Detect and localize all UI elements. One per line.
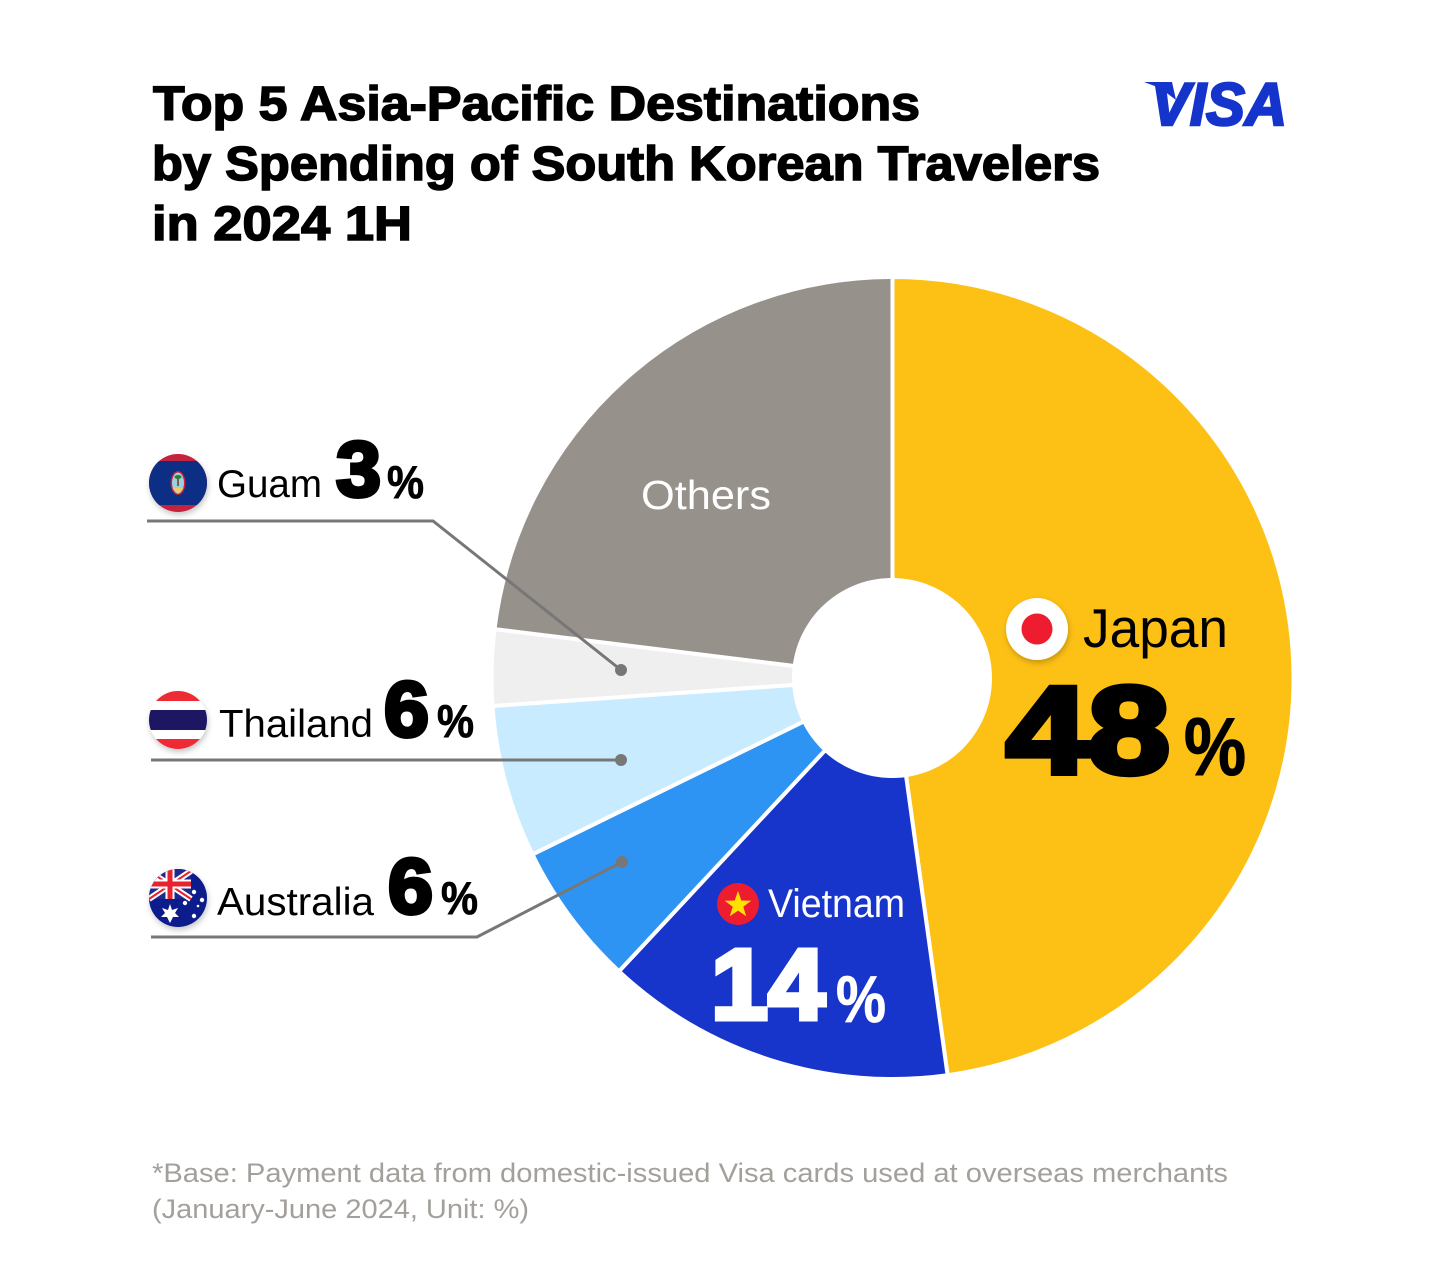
value: 6: 6 [388, 842, 433, 930]
country name: Guam: Guam [217, 463, 322, 506]
slice: Australia 6% [532, 678, 892, 971]
leader line [151, 758, 621, 762]
value: 3: 3 [336, 425, 381, 513]
label: Japan 48% [1006, 597, 1246, 800]
label: Vietnam 14% [711, 882, 905, 1041]
leader line [147, 521, 621, 670]
country name: Australia: Australia [217, 881, 374, 924]
donut hole [792, 578, 992, 778]
donut chart [492, 277, 1294, 1079]
footnote: (January-June 2024, Unit: %) [152, 1194, 529, 1224]
title: by Spending of South Korean Travelers [152, 138, 1100, 191]
value: 6: 6 [384, 665, 429, 753]
footnote: *Base: Payment data from domestic-issued Visa cards used at overseas merchants [152, 1158, 1228, 1188]
leader dot [615, 664, 627, 676]
percent sign: % [836, 962, 886, 1036]
title [152, 78, 1100, 251]
label: Others: Others [641, 472, 771, 518]
callout: Thailand 6% [147, 680, 627, 766]
leader line [151, 862, 622, 937]
icon: Japan flag [1006, 598, 1068, 660]
percent sign: % [441, 872, 478, 924]
slice: Guam 3% [492, 629, 892, 706]
value: 14: 14 [711, 929, 825, 1041]
icon: Vietnam flag [717, 883, 759, 925]
percent sign: % [437, 695, 474, 747]
callout: Australia 6% [147, 856, 628, 938]
slice: Thailand 6% [492, 678, 892, 854]
title: Top 5 Asia-Pacific Destinations [153, 78, 920, 131]
slice: Japan 48% [892, 277, 1294, 1075]
country name: Thailand: Thailand [219, 703, 373, 746]
leader dot [615, 754, 627, 766]
icon: Australia flag [149, 869, 207, 927]
slice: Others [494, 277, 892, 678]
leader dot [616, 856, 628, 868]
icon: Guam flag [149, 454, 207, 512]
percent sign: % [1184, 702, 1246, 793]
country name: Japan: Japan [1083, 597, 1228, 659]
percent sign: % [387, 456, 424, 508]
icon: Thailand flag [149, 691, 207, 749]
title: in 2024 1H [152, 198, 412, 251]
callout: Guam 3% [147, 425, 627, 676]
footnote [152, 1158, 1228, 1224]
value: 48: 48 [1006, 662, 1170, 800]
country name: Vietnam: Vietnam [768, 882, 905, 926]
logo: Visa: VISA [1151, 71, 1287, 138]
slice: Vietnam 14% [619, 678, 948, 1079]
